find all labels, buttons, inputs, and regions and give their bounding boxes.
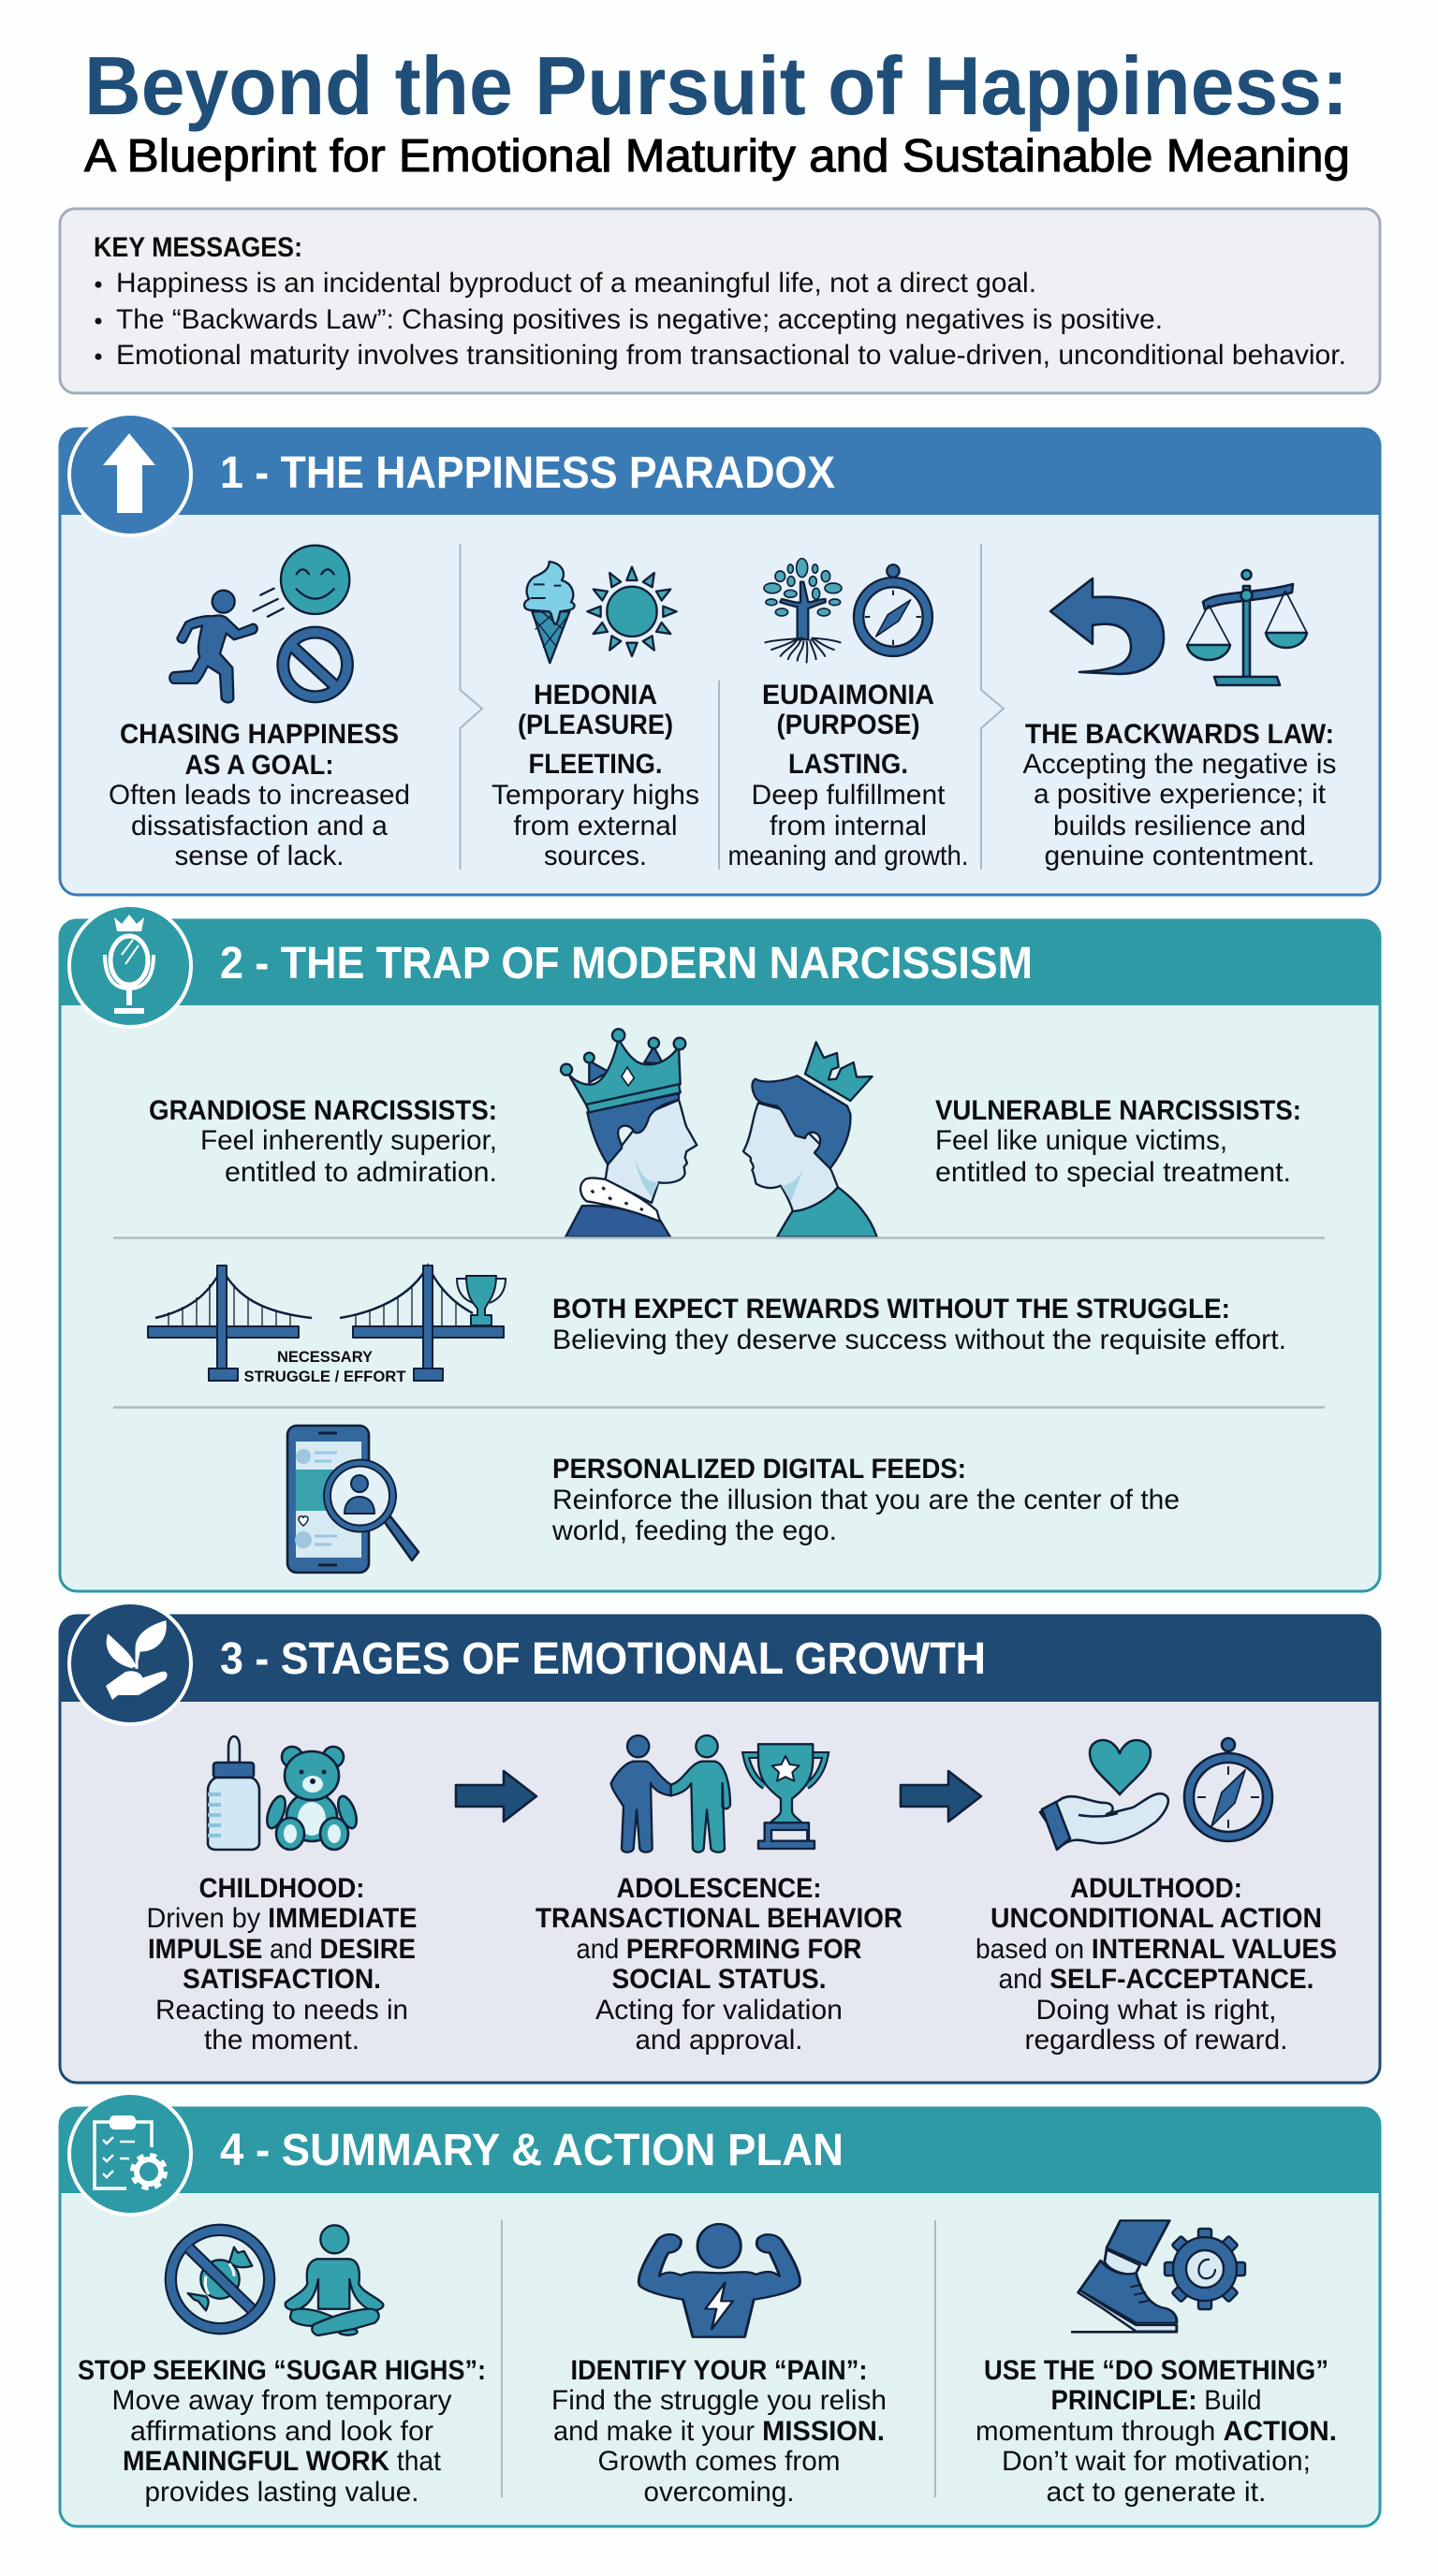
text: use the do something principle: Don’t wait for motivation; bbox=[1002, 2446, 1311, 2477]
icon: handshake and trophy bbox=[611, 1735, 826, 1852]
text: vulnerable narcissists: Feel like unique victims, bbox=[935, 1125, 1227, 1156]
title: Beyond the Pursuit of Happiness: bbox=[84, 39, 1348, 132]
text: grandiose narcissists: GRANDIOSE NARCISSISTS: bbox=[149, 1095, 497, 1126]
text: hedonia bbox=[492, 680, 699, 871]
text: identify your pain: overcoming. bbox=[644, 2477, 794, 2508]
illustration: crowned grandiose head bbox=[561, 1029, 697, 1237]
text: personalized digital feeds: Reinforce the illusion that you are the center of the bbox=[552, 1485, 1180, 1515]
text: stop seeking sugar highs: Move away from temporary bbox=[112, 2385, 451, 2416]
text: chasing happiness: CHASING HAPPINESS bbox=[120, 719, 399, 750]
icon: plant in hand badge bbox=[69, 1603, 191, 1724]
text: vulnerable narcissists: VULNERABLE NARCISSISTS: bbox=[935, 1095, 1301, 1126]
title: A Blueprint for Emotional Maturity and Sustainable Meaning bbox=[84, 131, 1350, 182]
text: eudaimonia bbox=[728, 680, 968, 871]
illustration: vulnerable head with broken crown bbox=[743, 1042, 877, 1237]
text: stop seeking sugar highs: provides lasting value. bbox=[144, 2477, 419, 2508]
text: stop seeking sugar highs: STOP SEEKING “SUGAR HIGHS”: bbox=[78, 2355, 486, 2386]
text: childhood bbox=[146, 1873, 418, 2056]
text: grandiose narcissists: entitled to admiration. bbox=[225, 1157, 497, 1188]
text: childhood: Driven by IMMEDIATE bbox=[146, 1903, 418, 1934]
text: identify your pain bbox=[551, 2355, 887, 2508]
text: hedonia: FLEETING. bbox=[528, 749, 663, 780]
text: adolescence: ADOLESCENCE: bbox=[616, 1873, 822, 1904]
text: adulthood: regardless of reward. bbox=[1024, 2025, 1288, 2056]
text: grandiose narcissists: Feel inherently superior, bbox=[200, 1125, 497, 1156]
text: eudaimonia: LASTING. bbox=[788, 749, 908, 780]
dividers: section 1 chevrons bbox=[461, 544, 1004, 870]
text: adulthood: based on INTERNAL VALUES bbox=[976, 1934, 1337, 1965]
icon: phone with magnifier bbox=[287, 1426, 418, 1573]
text: identify your pain: and make it your MISSION. bbox=[553, 2416, 885, 2447]
text: identify your pain: Growth comes from bbox=[597, 2446, 841, 2477]
panel: key messages: The “Backwards Law”: Chasing positives is negative; accepting negatives is positive. bbox=[116, 304, 1163, 335]
text: the backwards law: a positive experience; it bbox=[1034, 779, 1327, 810]
text: use the do something principle: momentum through ACTION. bbox=[976, 2416, 1337, 2447]
text: both expect rewards: BOTH EXPECT REWARDS WITHOUT THE STRUGGLE: bbox=[552, 1294, 1230, 1325]
text: chasing happiness: AS A GOAL: bbox=[185, 750, 333, 781]
text: adolescence: and PERFORMING FOR bbox=[577, 1934, 862, 1965]
text: adulthood: UNCONDITIONAL ACTION bbox=[990, 1903, 1322, 1934]
icon: heart in hand and compass bbox=[1040, 1738, 1272, 1850]
text: stop seeking sugar highs: MEANINGFUL WORK that bbox=[123, 2446, 442, 2477]
text: personalized digital feeds: world, feeding the ego. bbox=[551, 1515, 837, 1546]
icon: tree and compass bbox=[764, 559, 932, 663]
text: eudaimonia: (PURPOSE) bbox=[777, 710, 919, 740]
text: the backwards law: Accepting the negative is bbox=[1022, 749, 1337, 780]
text: vulnerable narcissists bbox=[935, 1095, 1301, 1188]
panel: key messages: KEY MESSAGES: bbox=[94, 232, 302, 263]
text: adolescence: SOCIAL STATUS. bbox=[612, 1964, 826, 1995]
text: the backwards law: builds resilience and bbox=[1053, 811, 1306, 842]
panel: key messages: Happiness is an incidental byproduct of a meaningful life, not a direct goal. bbox=[116, 268, 1036, 299]
text: chasing happiness: Often leads to increased bbox=[109, 780, 410, 811]
text: childhood: CHILDHOOD: bbox=[198, 1873, 365, 1904]
icon: ice cream and sun bbox=[524, 562, 677, 663]
heading: section 3: 3 - STAGES OF EMOTIONAL GROWTH bbox=[220, 1634, 986, 1684]
text: chasing happiness: dissatisfaction and a bbox=[131, 811, 388, 842]
text: the backwards law: genuine contentment. bbox=[1045, 841, 1314, 871]
text: childhood: the moment. bbox=[204, 2025, 360, 2056]
text: stop seeking sugar highs: affirmations and look for bbox=[130, 2416, 433, 2447]
text: hedonia: (PLEASURE) bbox=[518, 710, 673, 740]
text: use the do something principle: act to generate it. bbox=[1047, 2477, 1266, 2508]
panel: key messages: Emotional maturity involves transitioning from transactional to value-driven, unconditional behavior. bbox=[116, 340, 1346, 371]
text: use the do something principle: USE THE “DO SOMETHING” bbox=[984, 2355, 1328, 2386]
text: adulthood: ADULTHOOD: bbox=[1070, 1873, 1242, 1904]
icon: strongman with lightning bbox=[638, 2224, 800, 2337]
title bbox=[84, 39, 1350, 182]
icon: stepping foot and gear bbox=[1071, 2220, 1245, 2332]
text: both expect rewards bbox=[552, 1294, 1286, 1355]
icon: up arrow badge bbox=[69, 414, 191, 535]
text: hedonia: from external bbox=[513, 811, 678, 842]
text: childhood: IMPULSE and DESIRE bbox=[148, 1934, 416, 1965]
text: hedonia: Temporary highs bbox=[492, 780, 699, 811]
text: identify your pain: IDENTIFY YOUR “PAIN”: bbox=[571, 2355, 867, 2386]
icon: broken bridge with trophy bbox=[148, 1266, 506, 1385]
text: use the do something principle: PRINCIPLE: Build bbox=[1050, 2385, 1262, 2416]
heading: section 1: 1 - THE HAPPINESS PARADOX bbox=[220, 448, 835, 498]
panel: section 2 the trap of modern narcissism bbox=[59, 905, 1381, 1591]
text: hedonia: sources. bbox=[544, 841, 647, 871]
text: eudaimonia: meaning and growth. bbox=[728, 841, 968, 871]
icon: clipboard and gear badge bbox=[69, 2093, 191, 2215]
icon: mirror badge bbox=[69, 905, 191, 1027]
arrow: adolescence to adulthood bbox=[901, 1771, 981, 1822]
icon: chasing happiness runner bbox=[169, 546, 349, 702]
text: adulthood: and SELF-ACCEPTANCE. bbox=[998, 1964, 1314, 1995]
icon: broken bridge with trophy: NECESSARY bbox=[277, 1348, 374, 1366]
icon: no candy and meditator bbox=[170, 2225, 383, 2335]
icon: back arrow and scales bbox=[1050, 570, 1307, 685]
text: personalized digital feeds bbox=[551, 1454, 1180, 1546]
text: the backwards law bbox=[1022, 719, 1337, 871]
panel: key messages bbox=[60, 209, 1380, 393]
panel: section 4 summary and action plan bbox=[59, 2093, 1381, 2526]
text: grandiose narcissists bbox=[149, 1095, 497, 1188]
text: identify your pain: Find the struggle you relish bbox=[551, 2385, 887, 2416]
heading: section 2: 2 - THE TRAP OF MODERN NARCISSISM bbox=[220, 939, 1033, 988]
text: adulthood bbox=[976, 1873, 1337, 2056]
heading: section 4: 4 - SUMMARY & ACTION PLAN bbox=[220, 2126, 844, 2175]
panel: section 3 stages of emotional growth bbox=[59, 1603, 1381, 2083]
text: vulnerable narcissists: entitled to special treatment. bbox=[935, 1157, 1291, 1188]
text: the backwards law: THE BACKWARDS LAW: bbox=[1025, 719, 1334, 750]
arrow: childhood to adolescence bbox=[456, 1771, 536, 1822]
text: personalized digital feeds: PERSONALIZED DIGITAL FEEDS: bbox=[552, 1454, 966, 1485]
text: stop seeking sugar highs bbox=[78, 2355, 486, 2508]
text: chasing happiness: sense of lack. bbox=[174, 841, 345, 871]
text: eudaimonia: from internal bbox=[770, 811, 927, 842]
text: use the do something principle bbox=[976, 2355, 1337, 2508]
text: childhood: Reacting to needs in bbox=[155, 1995, 408, 2026]
icon: broken bridge with trophy: STRUGGLE / EFFORT bbox=[243, 1368, 406, 1385]
text: hedonia: HEDONIA bbox=[534, 680, 657, 710]
text: adolescence bbox=[536, 1873, 902, 2056]
text: both expect rewards: Believing they deserve success without the requisite effort. bbox=[552, 1325, 1286, 1355]
text: adolescence: TRANSACTIONAL BEHAVIOR bbox=[536, 1903, 902, 1934]
text: adolescence: and approval. bbox=[635, 2025, 803, 2056]
text: adulthood: Doing what is right, bbox=[1035, 1995, 1277, 2026]
text: chasing happiness bbox=[109, 719, 410, 871]
text: adolescence: Acting for validation bbox=[595, 1995, 843, 2026]
icon: bottle and teddy bear bbox=[208, 1736, 360, 1850]
text: childhood: SATISFACTION. bbox=[183, 1964, 381, 1995]
text: eudaimonia: Deep fulfillment bbox=[751, 780, 946, 811]
panel: section 1 the happiness paradox bbox=[59, 414, 1381, 895]
text: eudaimonia: EUDAIMONIA bbox=[762, 680, 934, 710]
